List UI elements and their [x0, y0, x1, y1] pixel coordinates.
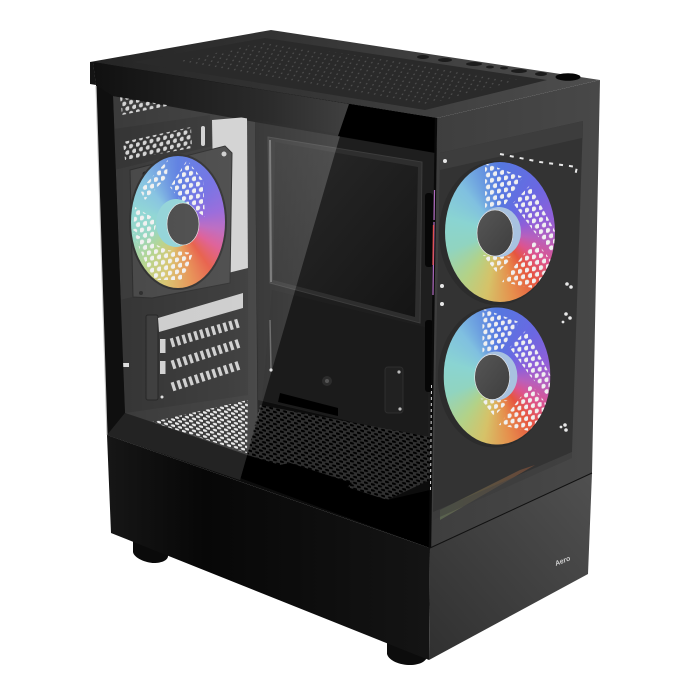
logo: Aero — [553, 555, 572, 568]
upper honeycomb — [120, 97, 172, 115]
top ports — [417, 55, 547, 76]
mesh area on top — [132, 38, 547, 110]
icon: left fan — [125, 146, 232, 298]
pci bracket panel — [120, 268, 248, 413]
screw specks — [500, 154, 577, 176]
icon: right fan top — [445, 162, 555, 302]
power button — [556, 73, 580, 81]
panel: left side interior behind glass — [93, 62, 437, 548]
cable holes — [425, 193, 433, 267]
slot cover tabs — [160, 339, 166, 353]
pci slot ticks — [171, 323, 240, 387]
panel: glass reflection — [96, 85, 349, 480]
icon: right fan bottom — [444, 308, 550, 444]
psu slot — [278, 393, 338, 416]
panel: top glass band — [90, 62, 437, 480]
panel: bottom shroud front — [429, 473, 592, 660]
floor — [247, 405, 430, 500]
pci top white strip — [158, 293, 243, 332]
foot: right — [387, 636, 427, 665]
motherboard window — [273, 142, 418, 317]
lower tray wall — [262, 290, 428, 440]
panel: top face — [90, 30, 600, 118]
front interior — [433, 121, 583, 512]
vent bracket — [114, 115, 212, 170]
second honeycomb — [123, 127, 192, 160]
white slot — [201, 126, 205, 146]
lower glass band — [107, 413, 247, 480]
white strip behind fan — [212, 117, 248, 295]
motherboard window rim — [268, 137, 422, 323]
panel: bottom shroud left — [107, 435, 430, 660]
foot: left — [133, 540, 168, 563]
left pillar — [96, 85, 125, 435]
drive bracket — [385, 367, 403, 413]
rear panel — [113, 96, 258, 480]
corner edge with colour sliver — [430, 118, 436, 548]
floor through glass — [152, 400, 248, 453]
main tray wall — [255, 122, 435, 440]
black base band — [232, 455, 430, 548]
top lip — [90, 62, 96, 85]
panel: right front glass — [430, 80, 600, 548]
bottom glow — [440, 465, 535, 520]
